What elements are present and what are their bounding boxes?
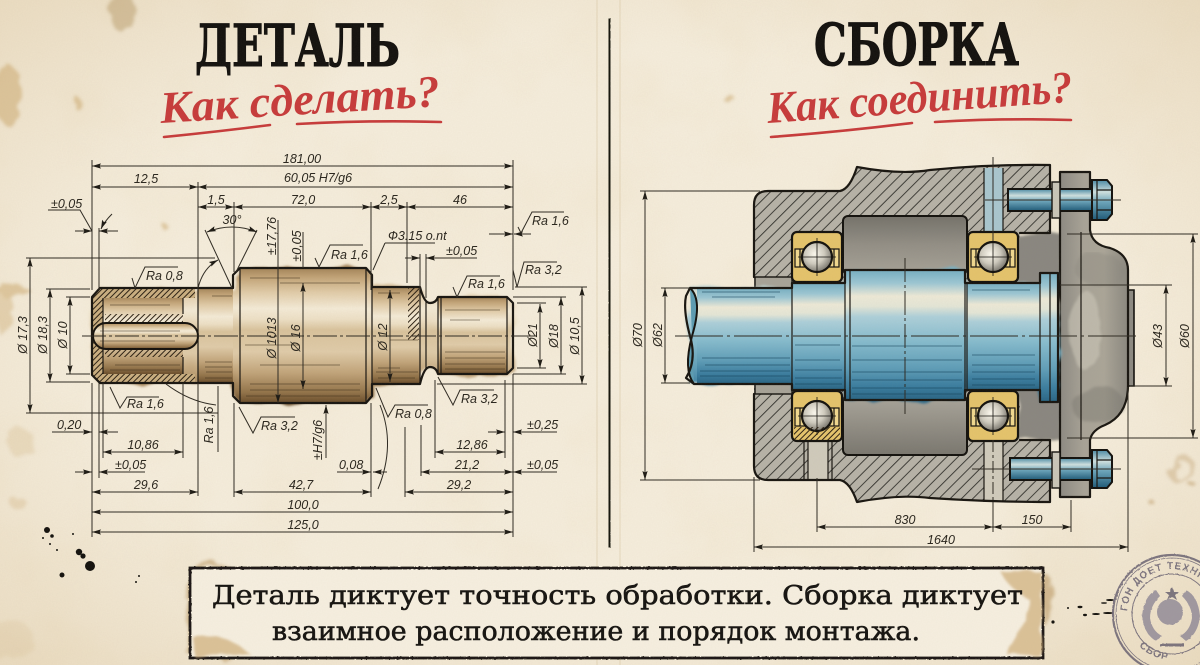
dimensions: top: 12,5: [134, 172, 158, 186]
ink splatters: [42, 527, 1114, 624]
dimensions: assembly: 830: [895, 513, 915, 527]
dimensions: bottom: 21,2: [454, 458, 479, 472]
drawing: housing section: [754, 165, 1062, 502]
surface roughness marks: Ra 1,6: [202, 407, 216, 443]
dimensions: right diameters: Ø 10,5: [568, 317, 582, 356]
dimensions: right diameters: [437, 287, 587, 384]
panel: detail: [16, 12, 587, 537]
surface roughness marks: Ra 3,2: [461, 392, 498, 406]
dimensions: left diameters: Ø 10: [56, 321, 70, 350]
dimensions: inner diameters: Ø 12: [376, 323, 390, 352]
drawing: shaft part: [82, 268, 535, 403]
surface roughness marks: Ra 1,6: [532, 214, 569, 228]
dimensions: top: [48, 152, 531, 298]
dimensions: top: 46: [453, 193, 467, 207]
dimensions: assembly: Ø62: [651, 323, 665, 348]
dimensions: bottom: ±0,05: [115, 458, 146, 472]
icon: ball bearing bottom left: [792, 391, 842, 441]
dimensions: bottom: 100,0: [287, 498, 319, 512]
dimensions: bottom: 29,6: [133, 478, 158, 492]
dimensions: inner diameters: Ø 16: [289, 324, 303, 353]
dimensions: bottom: [52, 374, 558, 537]
dimensions: assembly: Ø43: [1151, 324, 1165, 349]
dimensions: bottom: 0,20: [57, 418, 81, 432]
dimensions: top: 2,5: [379, 193, 398, 207]
stamp: СБОРКА: [1140, 642, 1168, 658]
dimensions: bottom: 10,86: [127, 438, 159, 452]
surface roughness marks: Ra 0,8: [395, 407, 432, 421]
drawing: bottom bolt: [972, 440, 1121, 505]
dimensions: right diameters: Ø21: [526, 323, 540, 348]
dimensions: bottom: 29,2: [446, 478, 471, 492]
dimensions: bottom: 0,08: [339, 458, 363, 472]
callout: conclusion box: [190, 568, 1043, 658]
dimensions: bottom: ±0,25: [527, 418, 558, 432]
dimensions: left diameters: Ø 17,3: [16, 316, 30, 355]
surface roughness marks: Ra 0,8: [146, 269, 183, 283]
surface roughness marks: [110, 212, 569, 460]
dimensions: bottom: 42,7: [289, 478, 314, 492]
dimensions: bottom: 12,86: [456, 438, 488, 452]
dimensions: top: 72,0: [291, 193, 315, 207]
dimensions: inner diameters: [265, 217, 390, 403]
heading: detail: ДЕТАЛЬ: [195, 12, 400, 80]
drawing: flange cover: [1060, 172, 1134, 497]
dimensions: inner diameters: ±0,05: [290, 230, 304, 262]
dimensions: assembly: Ø70: [631, 323, 645, 348]
surface roughness marks: Ra 1,6: [331, 248, 368, 262]
heading: assembly: СБОРКА: [814, 11, 1019, 79]
dimensions: top: 181,00: [283, 152, 321, 166]
surface roughness marks: ±H7/g6: [311, 420, 325, 460]
icon: ball bearing bottom right: [968, 391, 1018, 441]
dimensions: top: ±0,05: [51, 197, 82, 211]
panel: assembly: [631, 11, 1198, 552]
dimensions: top: ±0,05: [446, 244, 477, 258]
dimensions: top: 1,5: [207, 193, 225, 207]
dimensions: left diameters: [16, 258, 218, 413]
drawing: blue shaft: [675, 258, 1140, 415]
dimensions: top: 30°: [223, 213, 241, 227]
callout: conclusion box: Деталь диктует точность обработки. Сборка диктует: [212, 581, 1023, 611]
surface roughness marks: Ra 3,2: [525, 263, 562, 277]
dimensions: right diameters: Ø18: [547, 324, 561, 349]
icon: ball bearing top left: [792, 232, 842, 282]
subheading: how to make: Как сделать?: [158, 66, 441, 133]
dimensions: assembly: [631, 191, 1198, 552]
surface roughness marks: Ra 1,6: [127, 397, 164, 411]
surface roughness marks: Ra 1,6: [468, 277, 505, 291]
central vertical divider: [609, 18, 610, 548]
icon: ball bearing top right: [968, 232, 1018, 282]
dimensions: assembly: 1640: [927, 533, 955, 547]
subheading: how to connect: Как соединить?: [764, 62, 1074, 133]
dimensions: bottom: 125,0: [287, 518, 319, 532]
dimensions: inner diameters: Ø 1013: [265, 317, 279, 360]
dimensions: assembly: 150: [1022, 513, 1042, 527]
drawing: top bolt: [985, 157, 1121, 240]
dimensions: top: Ф3.15 о.nt: [388, 229, 447, 243]
dimensions: assembly: Ø60: [1178, 324, 1192, 349]
surface roughness marks: Ra 3,2: [261, 419, 298, 433]
dimensions: top: 60,05 H7/g6: [284, 171, 352, 185]
dimensions: inner diameters: ±17,76: [265, 217, 279, 255]
dimensions: bottom: ±0,05: [527, 458, 558, 472]
callout: conclusion box: взаимное расположение и порядок монтажа.: [272, 617, 920, 647]
dimensions: left diameters: Ø 18,3: [36, 316, 50, 355]
water stain marks: [188, 457, 1197, 658]
